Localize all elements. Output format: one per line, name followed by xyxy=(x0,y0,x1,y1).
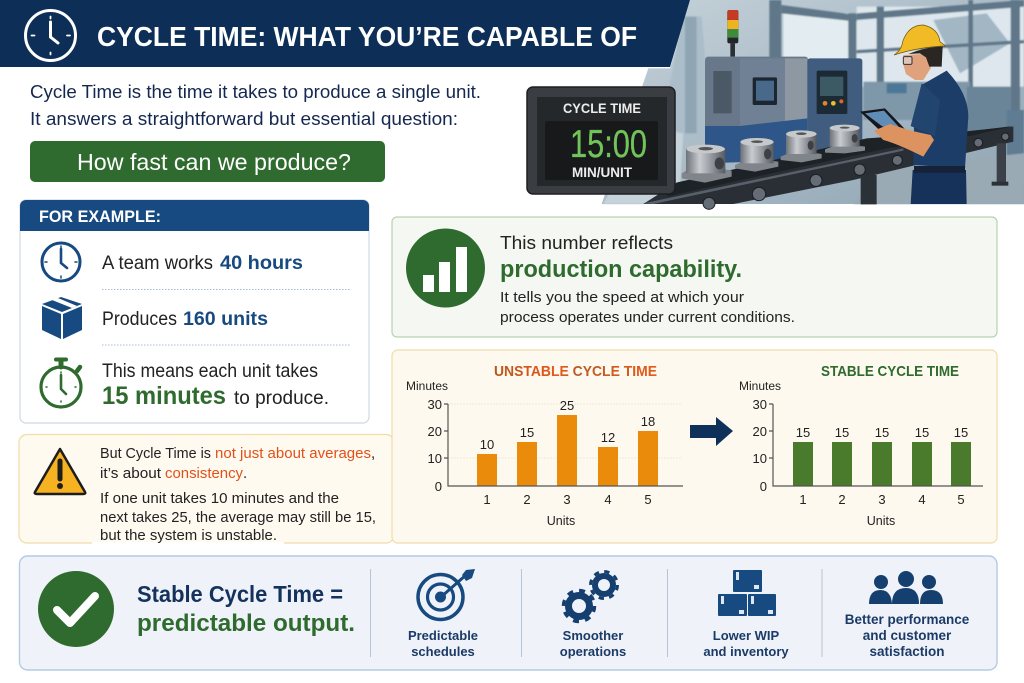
warning text: If one unit takes 10 minutes and the xyxy=(100,490,339,507)
chart: stable cycle time: STABLE CYCLE TIME xyxy=(821,363,959,380)
panel: stable cycle time benefits xyxy=(20,556,997,670)
text: each unit takes 15 minutes: 15 minutes xyxy=(102,382,226,410)
chart: stable cycle time: 0 xyxy=(760,479,767,494)
chart: unstable cycle time: 1 xyxy=(483,492,491,507)
chart: stable cycle time: Units xyxy=(867,514,895,528)
chart: stable cycle time: Minutes xyxy=(739,381,781,393)
panel: production capability xyxy=(392,217,997,337)
chart: unstable cycle time: 12 xyxy=(601,430,615,445)
benefit: smoother operations: Smoother xyxy=(563,628,623,643)
icon: box xyxy=(42,297,82,339)
worker with hard hat and tablet xyxy=(860,25,968,204)
benefit: smoother operations: operations xyxy=(560,644,626,659)
warning text: it’s about xyxy=(100,465,162,482)
chart: stable cycle time: 30 xyxy=(753,397,767,412)
digital display: 15:00 min/unit: 15:00 xyxy=(570,123,647,166)
chart: unstable cycle time: 30 xyxy=(428,397,442,412)
text: team works 40 hours xyxy=(102,253,303,274)
icon: warning triangle xyxy=(35,449,85,494)
icon: check badge xyxy=(38,571,114,647)
text: produces 160 units: 160 units xyxy=(183,309,268,330)
capability text: This number reflects xyxy=(500,233,673,253)
text: each unit takes 15 minutes xyxy=(102,361,329,410)
warning text: . xyxy=(243,465,247,482)
arrow xyxy=(690,417,733,446)
capability text: process operates under current conditions. xyxy=(500,309,795,326)
text: produces 160 units xyxy=(102,309,268,330)
chart: stable cycle time: 15 xyxy=(954,425,968,440)
warning text: not just about averages xyxy=(215,445,371,462)
statement text: Stable Cycle Time = xyxy=(137,581,343,607)
title banner xyxy=(0,0,690,67)
text: produces 160 units: Produces xyxy=(102,309,177,330)
question button xyxy=(30,141,385,182)
benefit: better performance: satisfaction xyxy=(869,644,945,659)
question button: How fast can we produce? xyxy=(77,149,351,175)
chart: unstable cycle time: 10 xyxy=(428,451,442,466)
text: each unit takes 15 minutes: to produce. xyxy=(234,388,329,409)
chart: unstable cycle time xyxy=(406,363,683,528)
illustration: factory worker and conveyor xyxy=(602,0,1024,209)
capability text: It tells you the speed at which your xyxy=(500,289,744,306)
benefit: lower WIP and inventory: and inventory xyxy=(703,644,789,659)
benefit: lower WIP and inventory xyxy=(703,570,789,659)
chart: stable cycle time: 5 xyxy=(957,492,965,507)
chart: unstable cycle time: 5 xyxy=(644,492,652,507)
statement text xyxy=(137,581,355,637)
capability text xyxy=(500,233,795,326)
icon: clock xyxy=(42,243,80,281)
chart: stable cycle time: 10 xyxy=(753,451,767,466)
intro text xyxy=(30,82,481,129)
machine xyxy=(705,57,862,163)
panel: for example xyxy=(20,200,369,423)
chart: unstable cycle time: UNSTABLE CYCLE TIME xyxy=(494,363,657,380)
panel: for example: FOR EXAMPLE: xyxy=(39,207,161,226)
chart: unstable cycle time: 10 xyxy=(480,437,494,452)
title text: CYCLE TIME: WHAT YOU’RE CAPABLE OF xyxy=(97,21,637,52)
warning text: , xyxy=(371,445,375,462)
chart: unstable cycle time: 3 xyxy=(563,492,571,507)
chart: stable cycle time: 15 xyxy=(835,425,849,440)
stack light xyxy=(727,10,738,57)
digital display: 15:00 min/unit: MIN/UNIT xyxy=(572,165,633,180)
text: team works 40 hours: 40 hours xyxy=(220,253,303,274)
chart: stable cycle time: 1 xyxy=(799,492,807,507)
intro text: Cycle Time is the time it takes to produce a single unit. xyxy=(30,82,481,102)
benefit: predictable schedules: Predictable xyxy=(408,628,478,643)
icon: clock xyxy=(26,10,76,60)
warning text: But Cycle Time is xyxy=(100,445,211,462)
text: each unit takes 15 minutes: This means each unit takes xyxy=(102,361,318,382)
chart: stable cycle time: 2 xyxy=(838,492,846,507)
chart: stable cycle time: 15 xyxy=(796,425,810,440)
capability text: production capability. xyxy=(500,256,742,283)
chart: unstable cycle time: 2 xyxy=(523,492,531,507)
conveyor xyxy=(643,126,1013,209)
intro text: It answers a straightforward but essential question: xyxy=(30,109,458,129)
chart: unstable cycle time: Units xyxy=(547,514,575,528)
benefit: better performance xyxy=(845,571,970,659)
chart: unstable cycle time: 15 xyxy=(520,425,534,440)
chart: unstable cycle time: 0 xyxy=(435,479,442,494)
chart: unstable cycle time: Minutes xyxy=(406,381,448,393)
panel: charts xyxy=(392,350,997,543)
warning text xyxy=(100,445,376,544)
chart: stable cycle time: 3 xyxy=(878,492,886,507)
chart: stable cycle time: 15 xyxy=(915,425,929,440)
chart: stable cycle time: 20 xyxy=(753,424,767,439)
benefit: better performance: Better performance xyxy=(845,612,970,627)
warning text: consistency xyxy=(165,465,243,482)
digital display: 15:00 min/unit: CYCLE TIME xyxy=(563,100,641,116)
warning text: next takes 25, the average may still be 15, xyxy=(100,509,376,526)
benefit: lower WIP and inventory: Lower WIP xyxy=(713,628,780,643)
icon: bar chart badge xyxy=(406,228,485,308)
benefit: better performance: and customer xyxy=(863,628,952,643)
panel: consistency warning xyxy=(19,434,394,544)
chart: stable cycle time: 4 xyxy=(918,492,926,507)
chart: unstable cycle time: 4 xyxy=(604,492,612,507)
chart: stable cycle time: 15 xyxy=(875,425,889,440)
chart: unstable cycle time: 25 xyxy=(560,398,574,413)
text: team works 40 hours: A team works xyxy=(102,253,213,274)
icon: stopwatch xyxy=(41,360,81,407)
chart: stable cycle time xyxy=(739,363,983,528)
statement text: predictable output. xyxy=(137,610,355,637)
chart: unstable cycle time: 20 xyxy=(428,424,442,439)
warning text: but the system is unstable. xyxy=(100,527,277,544)
machined parts on belt xyxy=(682,125,865,183)
benefit: predictable schedules xyxy=(408,569,478,659)
chart: unstable cycle time: 18 xyxy=(641,414,655,429)
benefit: smoother operations xyxy=(560,572,626,659)
digital display: 15:00 min/unit xyxy=(527,87,675,194)
benefit: predictable schedules: schedules xyxy=(411,644,475,659)
